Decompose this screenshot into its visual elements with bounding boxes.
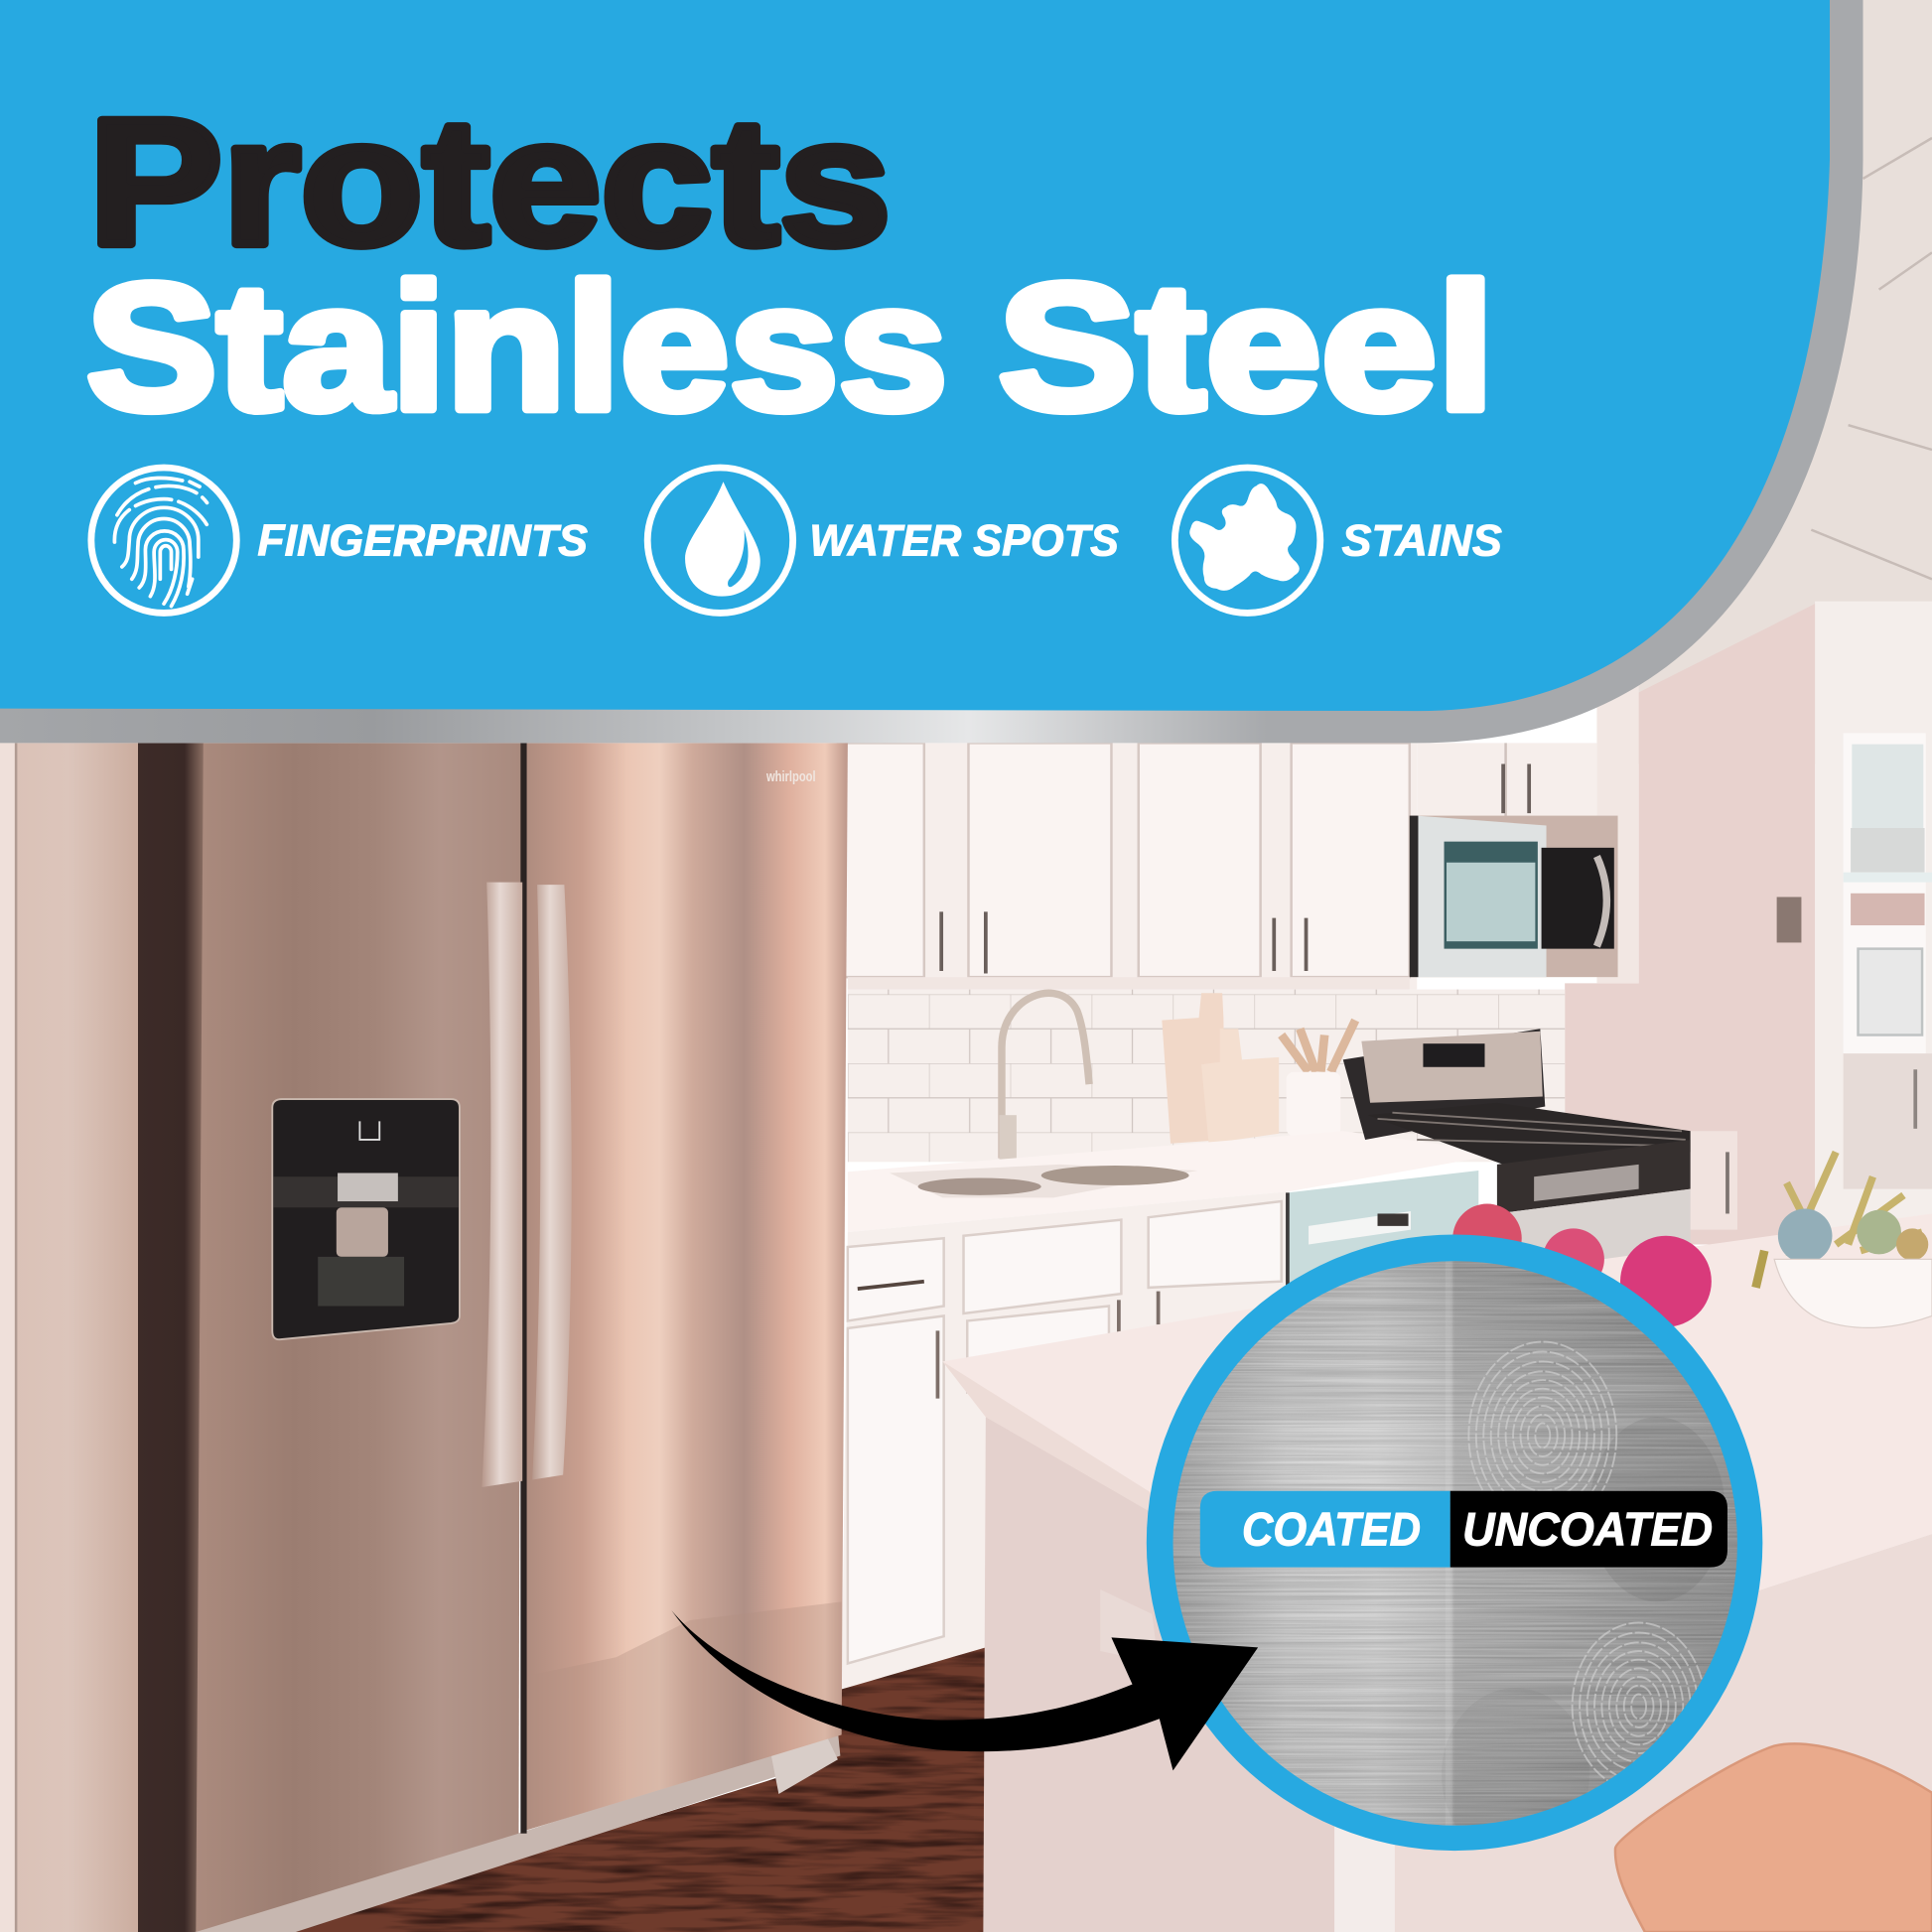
brushed metal surface xyxy=(1173,1261,1737,1861)
dishwasher xyxy=(1288,1171,1478,1307)
gas range xyxy=(1343,1029,1737,1282)
water dispenser xyxy=(272,1099,460,1339)
door reflection lower xyxy=(523,1601,842,1831)
upper cabinet rail xyxy=(848,977,1410,990)
faucet xyxy=(1000,993,1089,1160)
label: stains: STAINS xyxy=(1342,517,1502,566)
island pillar xyxy=(1334,1824,1395,1932)
title line: Stainless Steel: Steel xyxy=(998,247,1494,448)
utensil jar xyxy=(1282,1021,1355,1136)
callout: magnified steel circle xyxy=(1147,1235,1762,1861)
stool xyxy=(1615,1743,1932,1932)
fridge feet xyxy=(771,1728,838,1794)
left wall xyxy=(0,743,138,1932)
island speckled edge xyxy=(942,1361,1165,1522)
plant in bowl xyxy=(1756,1152,1932,1327)
blue ring xyxy=(1147,1235,1762,1851)
backsplash tiles xyxy=(848,990,1565,1162)
text: coated: COATED xyxy=(1242,1502,1421,1555)
fingerprint smudge upper xyxy=(1467,1340,1618,1491)
coated label pill xyxy=(1200,1491,1450,1568)
tall cabinet side xyxy=(1596,681,1639,983)
left door xyxy=(196,743,521,1932)
apples xyxy=(1452,1204,1712,1327)
fridge base grille xyxy=(195,1731,840,1932)
panel: blue banner xyxy=(0,0,1830,711)
panel: silver banner border xyxy=(0,0,1863,743)
brand mark: whirlpool xyxy=(765,769,816,785)
counter xyxy=(848,1131,1506,1232)
label: fingerprints: FINGERPRINTS xyxy=(257,517,588,566)
ceiling xyxy=(1601,0,1932,763)
title line: Protects: Protects xyxy=(88,82,891,283)
arrow: from fridge to magnified circle xyxy=(671,1610,1258,1770)
left handle xyxy=(482,883,522,1487)
fingerprint smudge lower xyxy=(1573,1622,1706,1790)
island right face xyxy=(1392,1534,1932,1932)
lower cabinets xyxy=(842,1191,1289,1690)
upper cabinets xyxy=(838,743,1596,990)
refrigerator xyxy=(138,743,848,1932)
right handle xyxy=(532,885,572,1480)
icon: stain splat xyxy=(1174,468,1320,613)
microwave xyxy=(1410,816,1618,977)
kitchen island xyxy=(942,1213,1932,1932)
right wall and window xyxy=(1815,602,1932,1282)
island top xyxy=(942,1213,1932,1682)
island left face xyxy=(983,1417,1392,1932)
cutting boards xyxy=(1162,993,1279,1144)
right door xyxy=(523,743,848,1831)
light switch xyxy=(1777,897,1801,942)
title line: Stainless Steel: Stainless xyxy=(86,247,947,448)
icon: fingerprint xyxy=(91,468,236,613)
pink column xyxy=(1565,604,1815,1244)
sink xyxy=(890,1165,1197,1197)
outlet xyxy=(1100,1589,1159,1663)
text: uncoated: UNCOATED xyxy=(1462,1502,1713,1555)
door gap xyxy=(520,743,527,1834)
label: water spots: WATER SPOTS xyxy=(809,517,1119,566)
icon: water drop xyxy=(647,468,793,613)
fridge side shadow xyxy=(138,743,205,1932)
uncoated label pill xyxy=(1450,1491,1727,1568)
hardwood floor xyxy=(283,1647,986,1932)
